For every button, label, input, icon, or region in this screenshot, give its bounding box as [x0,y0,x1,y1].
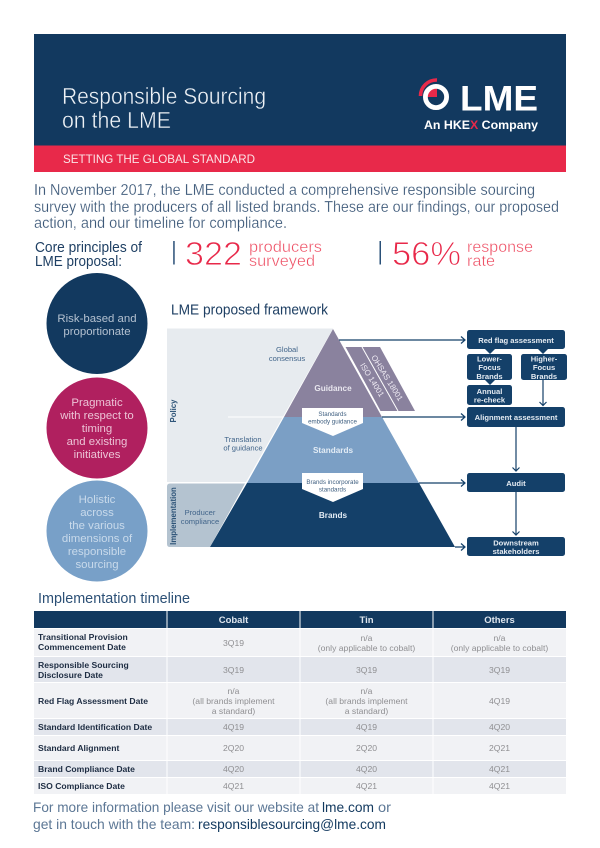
callout: standards embody guidance: Standards [318,411,347,418]
heading: core principles [35,240,143,270]
footer contact text: or [378,799,391,815]
table header row: Others [484,615,515,626]
policy band: consensus [269,354,305,363]
row: red flag assessment [34,683,566,718]
principle circle: holistic: dimensions of [62,533,133,545]
callout: brands incorporate standards: standards [319,486,346,494]
row: red flag assessment: 4Q19 [489,696,510,706]
principle circle: holistic: sourcing [75,559,119,571]
row: ISO compliance: 4Q21 [356,781,377,791]
row: transitional provision: n/a [361,633,373,643]
arrow: audit to downstream [512,492,520,535]
stat: 322 producers surveyed: producers [249,239,322,256]
footer contact text: get in touch with the team: [33,816,195,832]
row: standard alignment: 2Q20 [356,743,377,753]
arrow: pyramid to alignment assessment [382,414,465,420]
row: brand compliance: 4Q21 [489,764,510,774]
arrow: higher-focus to alignment [540,380,546,406]
implementation band: compliance [181,517,219,526]
principle circle: holistic [46,480,148,582]
framework diagram [167,328,567,556]
row: standard identification: 4Q19 [223,722,244,732]
footer contact text: lme.com [322,799,374,815]
row: red flag assessment: n/a [361,686,373,696]
row: red flag assessment: (all brands implement [192,696,275,706]
principle circle: pragmatic: Pragmatic [71,397,123,409]
footer contact text: For more information please visit our website at [33,799,319,815]
arrow: pyramid to red flag assessment [339,336,465,344]
principle circle: holistic: responsible [68,546,126,558]
red banner: setting the global standard: SETTING THE GLOBAL STANDARD [63,152,255,166]
logo: LME: LME [460,78,538,118]
box: audit [467,473,565,492]
stat: 322 producers surveyed [173,236,322,273]
header panel [34,34,566,146]
footer contact text: responsiblesourcing@lme.com [198,816,386,832]
box: higher-focus brands: Brands [531,372,557,381]
box: alignment assessment: Alignment assessment [475,413,558,422]
box: annual re-check: re-check [474,396,506,404]
intro text [34,182,559,232]
row: standard alignment: 2Q20 [223,743,244,753]
row: red flag assessment: a standard) [345,706,388,716]
principle circle: holistic: the various [69,520,125,532]
box: red flag assessment [467,330,565,354]
principle circle: pragmatic: timing [82,423,112,435]
box: annual re-check: Annual [477,387,502,396]
pyramid tier: guidance: Guidance [314,384,352,393]
row: transitional provision: 3Q19 [223,638,244,648]
box: higher-focus brands: Focus [533,363,555,372]
pyramid tier: guidance [284,329,382,417]
row: standard alignment: 2Q21 [489,743,510,753]
box: alignment assessment [467,407,565,427]
logo: LME [420,78,539,132]
row: responsible sourcing disclosure: 3Q19 [356,665,377,675]
row: red flag assessment: (all brands implement [325,696,408,706]
row: brand compliance [34,761,566,777]
row: brand compliance: Brand Compliance Date [38,764,135,774]
implementation band: Producer [185,508,216,517]
pyramid tier: standards: Standards [313,446,353,455]
principle circle: pragmatic: and existing [67,436,127,448]
row: responsible sourcing disclosure: 3Q19 [489,665,510,675]
row: brand compliance: 4Q20 [223,764,244,774]
policy band: Policy [169,399,178,422]
policy band: Translation [224,435,262,444]
row: responsible sourcing disclosure: 3Q19 [223,665,244,675]
heading: core principles: LME proposal: [35,254,122,270]
principle circle: holistic: Holistic [79,494,116,506]
box: higher-focus brands: Higher- [531,354,558,364]
intro text: action, and our timeline for compliance. [34,215,287,232]
stat: 322 producers surveyed: surveyed [249,253,315,270]
box: lower-focus brands: Focus [478,363,501,372]
stat: 322 producers surveyed: 322 [185,236,242,273]
principle circle: holistic: across [80,507,114,519]
standards strips: ISO 14001 [358,361,386,399]
intro text: survey with the producers of all listed brands. These are our findings, our proposed [34,199,559,216]
heading: LME proposed framework: LME proposed framework [171,302,329,318]
principle circle: pragmatic [46,378,148,478]
box: audit: Audit [506,479,526,488]
row: responsible sourcing disclosure: Responsible Sourcing [38,660,129,670]
policy band: Global [276,345,298,354]
box: lower-focus brands: Brands [476,372,503,381]
logo: LME: An HKE X Company [424,120,539,132]
row: ISO compliance [34,778,566,794]
principle circle: risk-based: Risk-based and [57,313,137,325]
row: brand compliance: 4Q20 [356,764,377,774]
pyramid tier: standards [247,417,419,483]
row: transitional provision: n/a [494,633,506,643]
callout: brands incorporate standards [302,473,363,502]
row: red flag assessment: Red Flag Assessment Date [38,696,148,706]
box: lower-focus brands [467,354,512,385]
row: standard identification: 4Q20 [489,722,510,732]
red banner: setting the global standard [34,146,566,172]
row: standard alignment [34,736,566,760]
box: higher-focus brands [521,354,567,381]
box: annual re-check [467,385,512,405]
policy band [167,328,333,482]
row: red flag assessment: n/a [228,686,240,696]
callout: brands incorporate standards: Brands incorporate [306,479,359,486]
row: transitional provision: Transitional Provision [38,632,128,642]
footer contact text [33,799,391,832]
intro text: In November 2017, the LME conducted a comprehensive responsible sourcing [34,182,535,199]
box: lower-focus brands: Lower- [477,354,502,364]
table header row [34,611,566,628]
implementation band [167,484,245,547]
pyramid tier: brands: Brands [319,511,348,520]
row: red flag assessment: a standard) [212,706,255,716]
stat: 56% response rate: response [467,239,533,256]
row: ISO compliance: ISO Compliance Date [38,781,125,791]
row: transitional provision: (only applicable to cobalt) [451,643,548,653]
box: downstream stakeholders [467,537,565,556]
table header row: Cobalt [219,615,249,626]
heading: implementation timeline: Implementation timeline [38,591,190,607]
standards strips [345,347,415,411]
row: standard alignment: Standard Alignment [38,743,119,753]
arrow: pyramid to audit [419,480,465,486]
title [62,83,266,133]
stat: 56% response rate: rate [467,253,495,270]
row: standard identification [34,719,566,735]
callout: standards embody guidance: embody guidance [308,418,357,426]
row: ISO compliance: 4Q21 [489,781,510,791]
callout: standards embody guidance [302,408,363,436]
timeline table [34,611,566,794]
row: responsible sourcing disclosure [34,657,566,682]
box: downstream stakeholders: stakeholders [493,547,539,556]
stat: 56% response rate: 56% [392,236,461,273]
principle circle: risk-based [46,273,148,374]
policy band: of guidance [223,444,263,452]
stat: 56% response rate [380,236,533,273]
box: red flag assessment: Red flag assessment [478,336,554,345]
principle circle: pragmatic: initiatives [74,449,121,461]
arrow: pyramid to downstream [455,544,465,550]
row: transitional provision: Commencement Date [38,642,126,652]
table header row: Tin [359,615,374,626]
heading: core principles: Core principles of [35,240,143,256]
title: on the LME [62,107,171,133]
row: responsible sourcing disclosure: Disclosure Date [38,670,103,680]
row: transitional provision: (only applicable to cobalt) [318,643,415,653]
row: standard identification: 4Q19 [356,722,377,732]
box: downstream stakeholders: Downstream [493,538,539,548]
principle circle: risk-based: proportionate [63,326,131,338]
row: standard identification: Standard Identification Date [38,722,152,732]
arrow: alignment to audit [512,427,520,471]
principle circle: pragmatic: with respect to [59,410,134,422]
pyramid tier: brands [210,483,455,547]
row: ISO compliance: 4Q21 [223,781,244,791]
implementation band: Implementation [169,487,178,545]
standards strips: OHSAS 18001 [369,353,405,403]
title: Responsible Sourcing [62,83,266,109]
row: transitional provision [34,629,566,656]
